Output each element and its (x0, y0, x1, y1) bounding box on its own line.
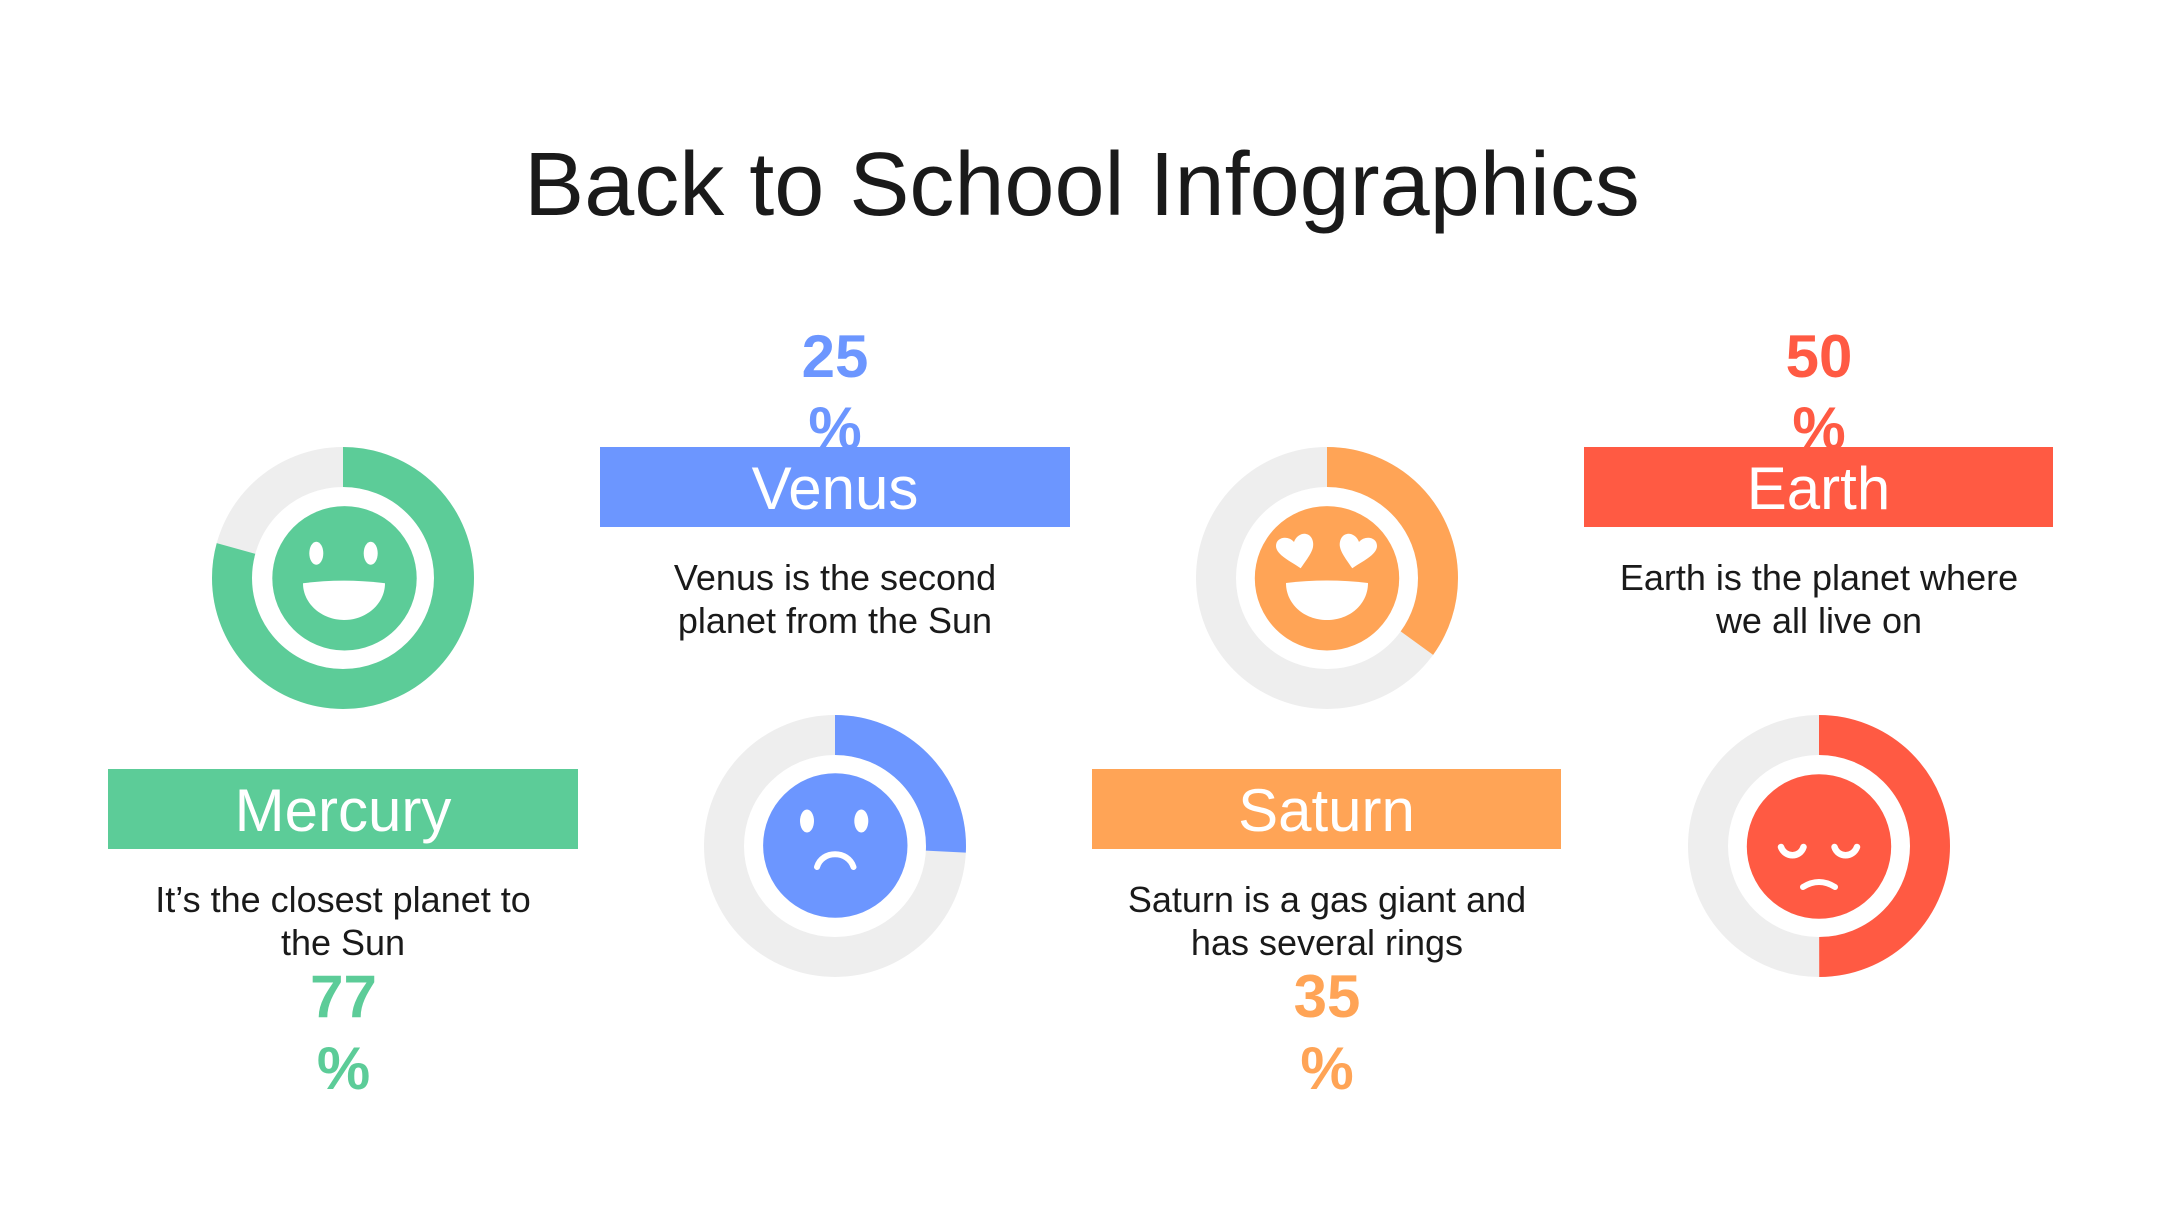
donut chart: Saturn 35% (1216, 467, 1438, 689)
description: Venus: planet from the Sun (678, 600, 992, 641)
panel: Earth (1584, 323, 2053, 957)
description: Earth: Earth is the planet where (1620, 557, 2018, 598)
donut chart: Venus 25% (724, 735, 946, 957)
label bar: Venus (600, 447, 1070, 527)
label bar: Saturn: Saturn (1238, 777, 1415, 844)
label bar: Mercury: Mercury (235, 777, 451, 844)
label bar: Saturn (1092, 769, 1561, 849)
icon: sleepy sad face (1747, 774, 1891, 919)
description: Saturn: Saturn is a gas giant and (1128, 879, 1526, 920)
panel: Mercury (108, 467, 578, 1102)
icon: grinning face (272, 506, 417, 650)
percentage: 25%: % (808, 395, 862, 462)
title: Back to School Infographics (524, 135, 1640, 235)
icon: heart-eyes face (1255, 506, 1399, 650)
label bar: Earth (1584, 447, 2053, 527)
description: Earth: we all live on (1715, 600, 1922, 641)
panel: Venus (600, 323, 1070, 957)
percentage: 25%: 25 (802, 323, 868, 390)
percentage: 35%: 35 (1294, 963, 1360, 1030)
donut chart: Mercury 77% (232, 467, 454, 689)
percentage: 77%: % (317, 1035, 370, 1102)
description: Venus: Venus is the second (674, 557, 996, 598)
percentage: 77%: 77 (310, 963, 377, 1030)
donut chart: Earth 50% (1708, 735, 1930, 957)
panel: Saturn (1092, 467, 1561, 1102)
percentage: 50%: 50 (1786, 323, 1852, 390)
percentage: 50%: % (1792, 395, 1846, 462)
icon: sad face (763, 773, 908, 918)
description: Mercury: It’s the closest planet to (155, 879, 531, 920)
label bar: Venus: Venus (752, 455, 918, 522)
percentage: 35%: % (1300, 1035, 1354, 1102)
label bar: Mercury (108, 769, 578, 849)
description: Saturn: has several rings (1191, 922, 1463, 963)
description: Mercury: the Sun (281, 922, 405, 963)
label bar: Earth: Earth (1747, 455, 1890, 522)
